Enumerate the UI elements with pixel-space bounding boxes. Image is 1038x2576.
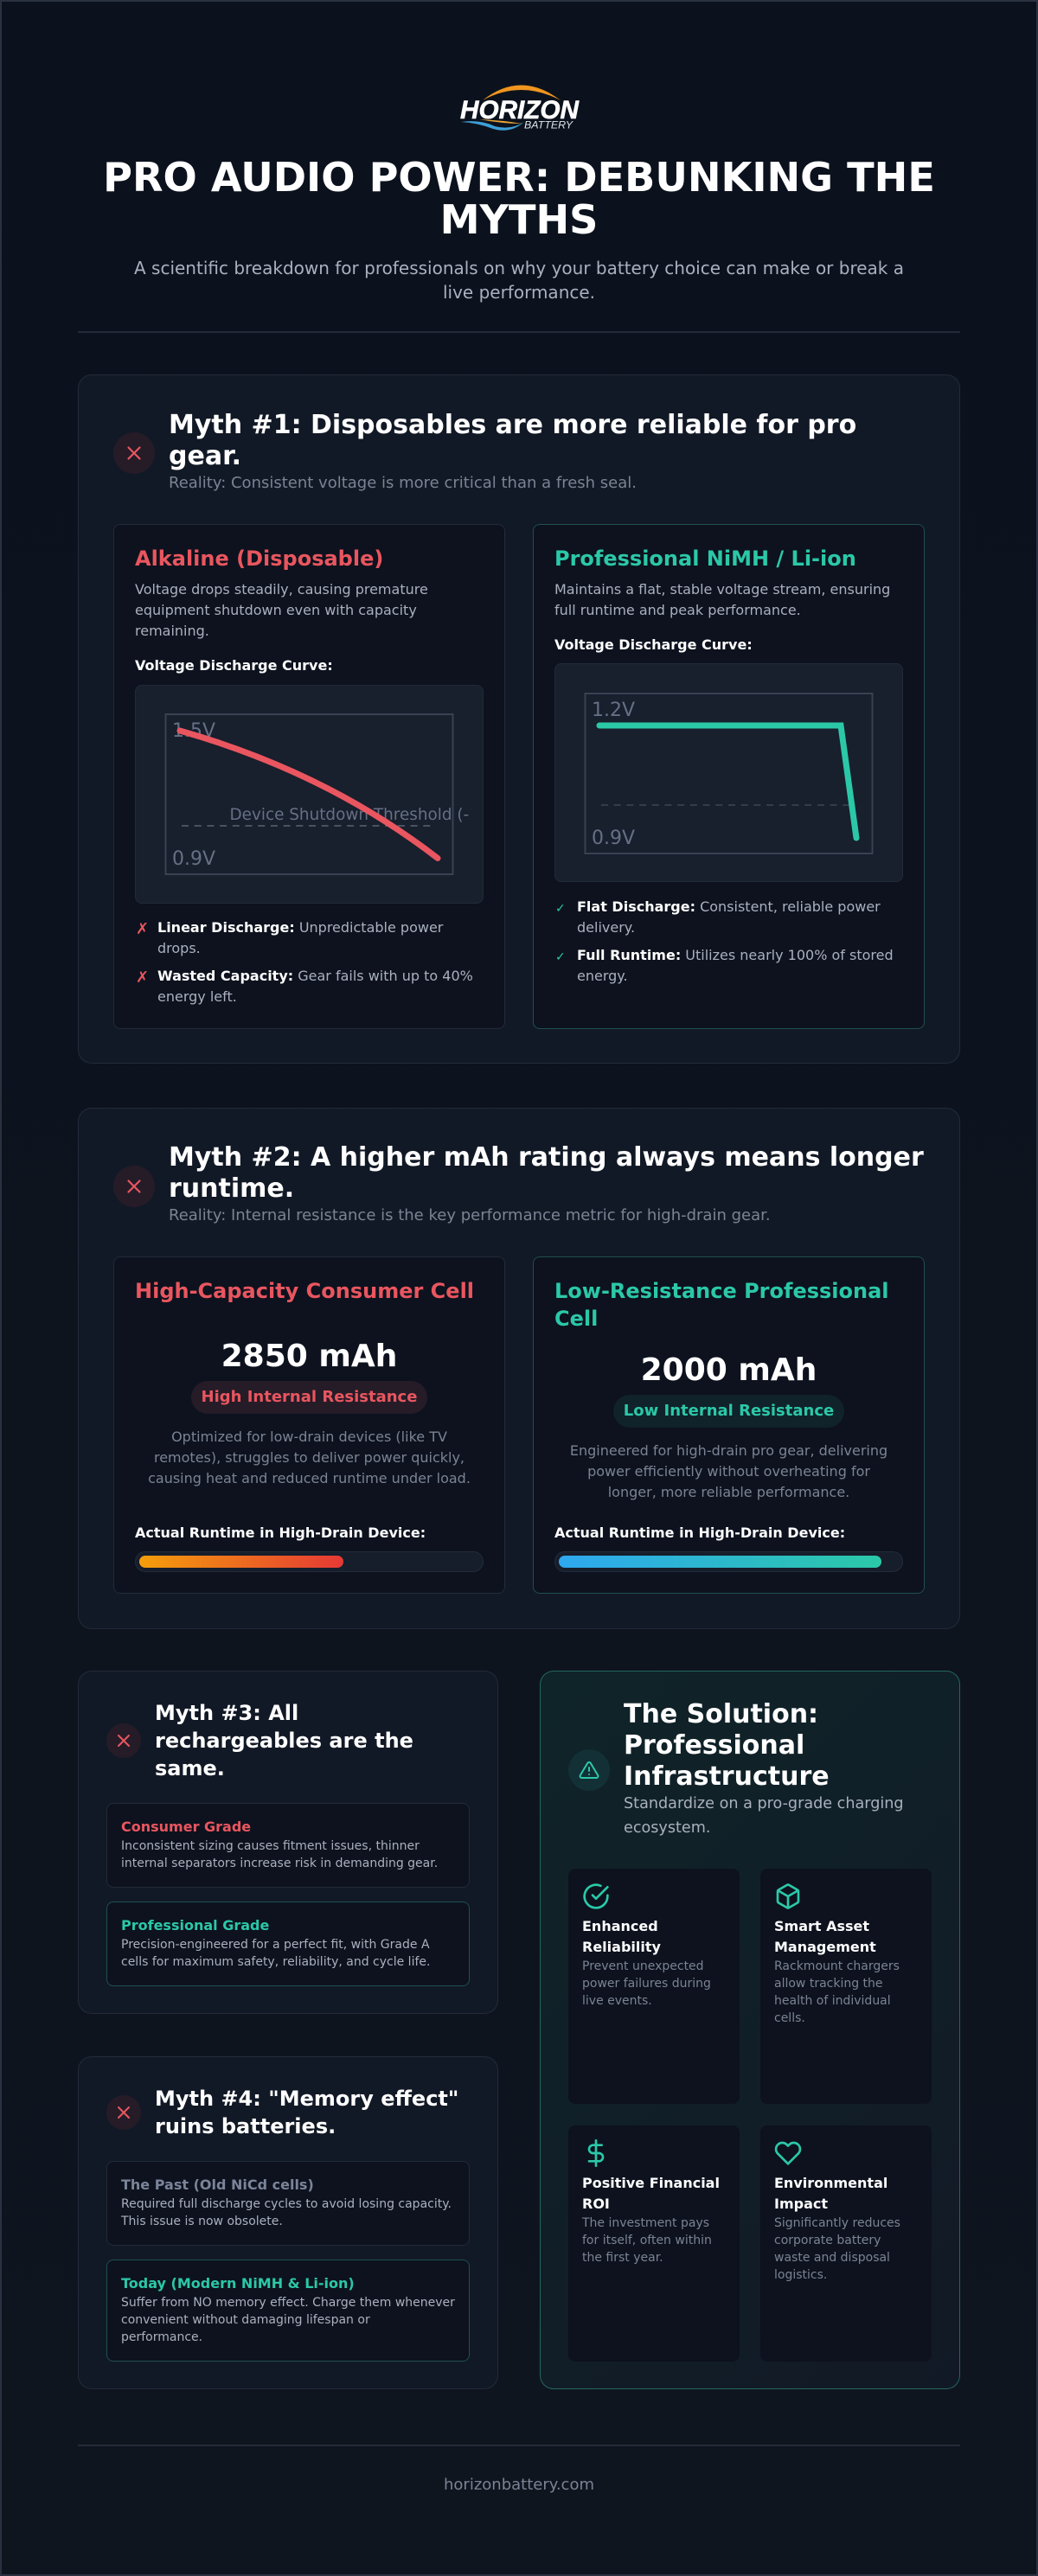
benefit: environmental impact: Significantly reduces corporate battery waste and disposal logistics. <box>774 2216 900 2282</box>
sub-card: consumer grade <box>106 1803 470 1888</box>
benefit: smart asset management <box>760 1869 932 2104</box>
card description: Maintains a flat, stable voltage stream, ensuring full runtime and peak performance. <box>554 581 890 618</box>
card: consumer cell <box>113 1256 505 1594</box>
solution subtitle: Standardize on a pro-grade charging ecosystem. <box>624 1795 904 1837</box>
capacity figure: 2000 mAh <box>641 1352 817 1388</box>
heading: solution: The Solution: Professional Infrastructure <box>624 1699 830 1792</box>
chart: professional discharge curve <box>554 663 903 882</box>
panel: myth 1 <box>78 374 960 1064</box>
benefit: positive financial roi: The investment pays for itself, often within the first year. <box>582 2216 712 2265</box>
card: professional cell <box>533 1256 925 1594</box>
chart: alkaline discharge curve: 0.9V <box>172 848 215 870</box>
chart: alkaline discharge curve <box>135 685 484 904</box>
sub-card: today <box>106 2260 470 2362</box>
sub-card: today: Suffer from NO memory effect. Charge them whenever convenient without damaging lifespan or <box>121 2296 455 2327</box>
card title: High-Capacity Consumer Cell <box>135 1279 474 1303</box>
benefit: environmental impact <box>760 2125 932 2362</box>
benefit: positive financial roi <box>568 2125 740 2362</box>
heading: myth 4: Myth #4: "Memory effect" ruins batteries. <box>155 2087 458 2138</box>
badge: low resistance: Low Internal Resistance <box>624 1402 834 1420</box>
sub-card: consumer grade: Inconsistent sizing causes fitment issues, thinner internal separators increase risk in demanding gear. <box>121 1839 438 1870</box>
bullet: full runtime: ✓ <box>555 950 566 964</box>
sub-card: the past: Required full discharge cycles to avoid losing capacity. This issue is now obsolete. <box>121 2197 452 2228</box>
card: professional <box>533 524 925 1029</box>
card title: Low-Resistance Professional Cell <box>554 1279 889 1331</box>
badge: high resistance: High Internal Resistance <box>202 1388 417 1406</box>
sub-card: professional grade: Professional Grade <box>121 1917 269 1934</box>
panel: the solution <box>540 1671 960 2389</box>
benefit: enhanced reliability: Prevent unexpected power failures during live events. <box>582 1959 711 2008</box>
chart: professional discharge curve: 1.2V <box>592 700 635 721</box>
chart label: Voltage Discharge Curve: <box>554 636 753 653</box>
panel: myth 3 <box>78 1671 498 2014</box>
benefit: environmental impact: Environmental Impact <box>774 2175 887 2212</box>
icon: alert triangle <box>568 1749 610 1791</box>
runtime label: Actual Runtime in High-Drain Device: <box>554 1525 845 1541</box>
logo subtitle: BATTERY <box>524 119 573 131</box>
logo: Horizon Battery <box>460 85 580 131</box>
sub-card: today: performance. <box>121 2330 202 2344</box>
chart: alkaline discharge curve: 1.5V <box>172 720 215 742</box>
icon: myth 4 x <box>106 2095 141 2130</box>
capacity figure: 2850 mAh <box>221 1339 397 1374</box>
subtitle: A scientific breakdown for professionals on why your battery choice can make or break a live performance. <box>134 258 904 303</box>
sub-card: consumer grade: Consumer Grade <box>121 1819 251 1835</box>
chart: alkaline discharge curve: Device Shutdown Threshold (- <box>230 806 469 824</box>
benefit: enhanced reliability: Enhanced Reliability <box>582 1918 661 1955</box>
card title: Alkaline (Disposable) <box>135 547 383 571</box>
panel: myth 2 <box>78 1108 960 1629</box>
footer url: horizonbattery.com <box>444 2476 594 2494</box>
title: PRO AUDIO POWER: DEBUNKING THE MYTHS <box>103 154 935 243</box>
chart: professional discharge curve: 0.9V <box>592 828 635 849</box>
runtime label: Actual Runtime in High-Drain Device: <box>135 1525 426 1541</box>
sub-card: professional grade <box>106 1902 470 1986</box>
card title: Professional NiMH / Li-ion <box>554 547 856 571</box>
panel: myth 4 <box>78 2056 498 2389</box>
sub-card: today: Today (Modern NiMH & Li-ion) <box>121 2275 355 2292</box>
bullet: flat discharge: Flat Discharge: Consistent, reliable power delivery. <box>577 898 881 936</box>
bullet: wasted capacity: Wasted Capacity: Gear fails with up to 40% energy left. <box>157 968 473 1005</box>
logo arc <box>483 85 561 100</box>
description: Engineered for high-drain pro gear, delivering power efficiently without overheating for longer, more reliable performance. <box>570 1442 887 1500</box>
bullet: full runtime: Full Runtime: Utilizes nearly 100% of stored energy. <box>577 947 894 984</box>
chart label: Voltage Discharge Curve: <box>135 657 333 674</box>
reality line: myth 2: Reality: Internal resistance is the key performance metric for high-drain gear. <box>169 1206 771 1224</box>
icon: myth 1 x <box>113 432 155 474</box>
bullet: linear discharge: ✗ <box>136 920 149 938</box>
benefit: smart asset management: Rackmount chargers allow tracking the health of individual cells. <box>774 1959 900 2025</box>
bullet: wasted capacity: ✗ <box>136 968 149 987</box>
benefit: smart asset management: Smart Asset Management <box>774 1918 876 1955</box>
sub-card: the past <box>106 2161 470 2246</box>
heading: myth 3: Myth #3: All rechargeables are the same. <box>155 1701 413 1780</box>
description: Optimized for low-drain devices (like TV remotes), struggles to deliver power quickly, causing heat and reduced runtime under load. <box>148 1429 471 1486</box>
bullet: flat discharge: ✓ <box>555 902 566 916</box>
benefit: positive financial roi: Positive Financial ROI <box>582 2175 720 2212</box>
icon: myth 2 x <box>113 1166 155 1207</box>
runtime bar: professional <box>554 1551 903 1572</box>
card description: Voltage drops steadily, causing premature equipment shutdown even with capacity remaining. <box>135 581 428 639</box>
card: alkaline <box>113 524 505 1029</box>
heading: myth 2: Myth #2: A higher mAh rating always means longer runtime. <box>169 1142 924 1204</box>
bullet: linear discharge: Linear Discharge: Unpredictable power drops. <box>157 919 443 956</box>
logo wave <box>461 121 524 131</box>
logo wordmark: HORIZON <box>460 96 580 125</box>
benefit: enhanced reliability <box>568 1869 740 2104</box>
sub-card: the past: The Past (Old NiCd cells) <box>121 2176 314 2193</box>
sub-card: professional grade: Precision-engineered for a perfect fit, with Grade A cells for maximum safety, reliability, and cycle life. <box>121 1938 430 1969</box>
reality line: myth 1: Reality: Consistent voltage is more critical than a fresh seal. <box>169 474 637 492</box>
runtime bar: consumer <box>135 1551 484 1572</box>
heading: myth 1: Myth #1: Disposables are more reliable for pro gear. <box>169 410 856 471</box>
icon: myth 3 x <box>106 1723 141 1758</box>
